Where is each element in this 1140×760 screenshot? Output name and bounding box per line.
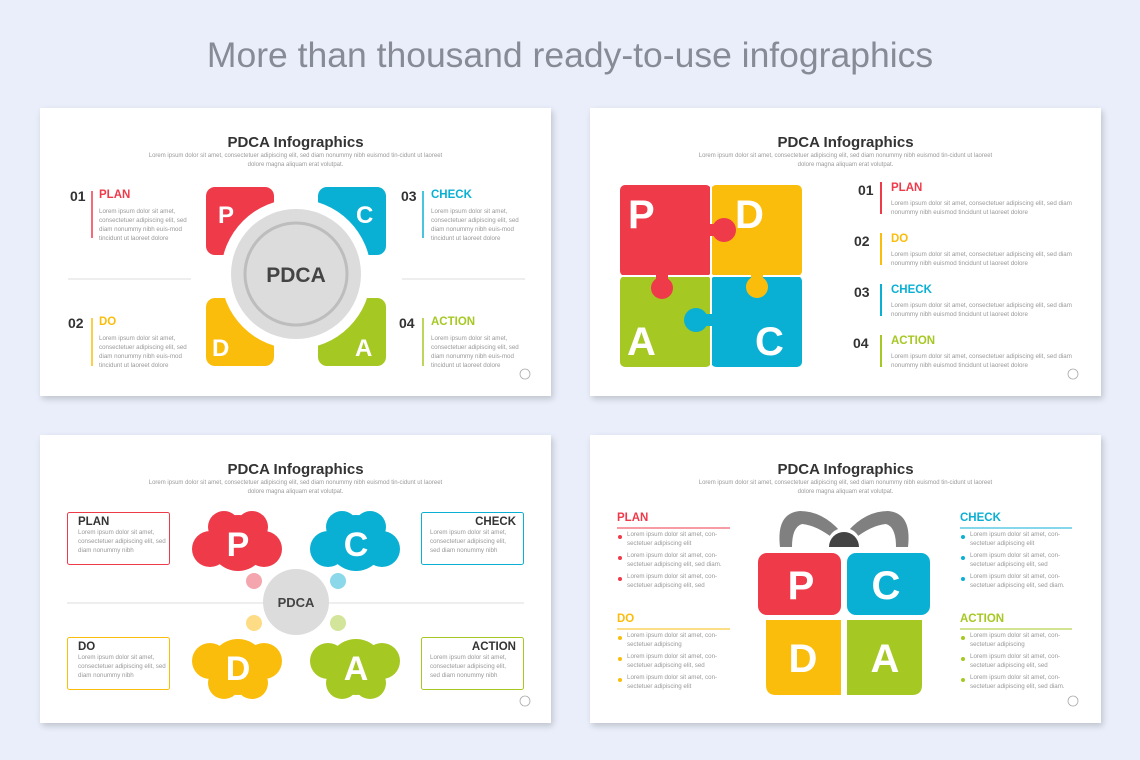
panel title: PDCA Infographics: [777, 134, 914, 151]
chart: PDCA circle: D: [212, 335, 229, 362]
chart: gift box: A: [871, 637, 899, 681]
item: plan: [858, 182, 1072, 216]
list: plan: Lorem ipsum dolor sit amet, con-sectetuer adipiscing elit Lorem ipsum dolor sit amet, con-sectetuer adipiscing elit, sed diam. Lorem ipsum dolor sit amet, con-sectetuer adipiscing elit, sed: [627, 531, 722, 589]
box: do: [78, 641, 166, 679]
subtitle: Lorem ipsum dolor sit amet, consectetuer adipiscing elit, sed diam nonummy nibh euismod tin-cidunt ut laoreet dolore magna aliquam erat volutpat.: [699, 153, 992, 168]
item: do: 02: [854, 233, 870, 249]
chart: clouds: A: [344, 650, 368, 688]
subtitle: Lorem ipsum dolor sit amet, consectetuer adipiscing elit, sed diam nonummy nibh euismod tin-cidunt ut laoreet dolore magna aliquam erat volutpat.: [149, 153, 442, 168]
chart: clouds: PDCA: [278, 595, 315, 610]
chart: clouds: C: [344, 526, 368, 564]
list: do: Lorem ipsum dolor sit amet, con-sectetuer adipiscing Lorem ipsum dolor sit amet, con-sectetuer adipiscing elit, sed Lorem ipsum dolor sit amet, con-sectetuer adipiscing elit: [627, 632, 717, 690]
chart: puzzle: P: [628, 193, 655, 237]
chart: clouds: P: [227, 526, 249, 564]
item: do: [854, 233, 1072, 267]
panel: gift: [590, 435, 1101, 723]
panel title: PDCA Infographics: [227, 134, 364, 151]
box: action: [430, 641, 516, 679]
item: check: [401, 188, 519, 242]
item: do: Lorem ipsum dolor sit amet, consectetuer adipiscing elit, sed diam nonummy nibh euismod tincidunt ut laoreet dolore: [891, 251, 1072, 267]
item: check: Lorem ipsum dolor sit amet, consectetuer adipiscing elit, sed diam nonummy nibh euismod tincidunt ut laoreet dolore: [891, 302, 1072, 318]
chart: PDCA circle: PDCA: [266, 264, 326, 287]
chart: clouds: D: [226, 650, 250, 688]
box: check: [430, 516, 516, 554]
box: plan: PLAN: [78, 516, 109, 528]
item: action: Lorem ipsum dolor sit amet, consectetuer adipiscing elit, sed diam nonummy nibh euismod tincidunt ut laoreet dolore: [891, 353, 1072, 369]
box: plan: Lorem ipsum dolor sit amet, consectetuer adipiscing elit, sed diam nonummy nibh: [78, 529, 166, 554]
panel: clouds: [40, 435, 551, 723]
subtitle: Lorem ipsum dolor sit amet, consectetuer adipiscing elit, sed diam nonummy nibh euismod tin-cidunt ut laoreet dolore magna aliquam erat volutpat.: [149, 480, 442, 495]
item: check: [854, 284, 1072, 318]
chart: gift box: P: [788, 564, 814, 608]
panel title: PDCA Infographics: [227, 461, 364, 478]
item: action: 04: [853, 335, 869, 351]
item: action: 04: [399, 315, 415, 331]
panel: puzzle: [590, 108, 1101, 396]
item: do: DO: [891, 233, 908, 245]
list: plan: [617, 512, 722, 589]
item: action: ACTION: [431, 316, 475, 328]
chart: puzzle: [620, 182, 1078, 380]
box: action: Lorem ipsum dolor sit amet, consectetuer adipiscing elit, sed diam nonummy nibh: [430, 654, 506, 679]
chart: clouds: [67, 511, 530, 706]
item: check: Lorem ipsum dolor sit amet, consectetuer adipiscing elit, sed diam nonummy nibh euis-mod tincidunt ut laoreet dolore: [431, 208, 519, 242]
box: check: CHECK: [475, 516, 516, 528]
item: action: [853, 335, 1072, 369]
box: check: Lorem ipsum dolor sit amet, consectetuer adipiscing elit, sed diam nonummy nibh: [430, 529, 506, 554]
item: action: [399, 315, 519, 369]
chart: PDCA circle: A: [355, 335, 372, 362]
chart: gift box: [617, 511, 1078, 706]
list: action: [960, 613, 1065, 690]
chart: PDCA circle: P: [218, 202, 234, 229]
item: plan: Lorem ipsum dolor sit amet, consectetuer adipiscing elit, sed diam nonummy nibh euismod tincidunt ut laoreet dolore: [891, 200, 1072, 216]
item: do: [68, 315, 187, 369]
box: do: Lorem ipsum dolor sit amet, consectetuer adipiscing elit, sed diam nonummy nibh: [78, 654, 166, 679]
item: check: CHECK: [891, 284, 932, 296]
item: do: DO: [99, 316, 116, 328]
chart: puzzle: D: [735, 193, 764, 237]
chart: gift box: C: [872, 564, 900, 608]
chart: puzzle: C: [755, 320, 784, 364]
item: action: Lorem ipsum dolor sit amet, consectetuer adipiscing elit, sed diam nonummy nibh euis-mod tincidunt ut laoreet dolore: [431, 335, 519, 369]
main title: More than thousand ready-to-use infographics: [207, 35, 933, 75]
item: plan: 01: [858, 182, 874, 198]
item: action: ACTION: [891, 335, 935, 347]
panel: circle quadrants: [40, 108, 551, 396]
list: check: Lorem ipsum dolor sit amet, con-sectetuer adipiscing elit Lorem ipsum dolor sit amet, con-sectetuer adipiscing elit, sed Lorem ipsum dolor sit amet, con-sectetuer adipiscing elit, sed diam.: [970, 531, 1065, 589]
box: action: ACTION: [472, 641, 516, 653]
item: check: 03: [854, 284, 870, 300]
item: plan: PLAN: [99, 189, 130, 201]
item: check: CHECK: [431, 189, 472, 201]
box: plan: [78, 516, 166, 554]
chart: puzzle: A: [627, 320, 656, 364]
chart: gift box: D: [789, 637, 817, 681]
item: do: 02: [68, 315, 84, 331]
list: action: Lorem ipsum dolor sit amet, con-sectetuer adipiscing Lorem ipsum dolor sit amet, con-sectetuer adipiscing elit, sed Lorem ipsum dolor sit amet, con-sectetuer adipiscing elit, sed diam.: [970, 632, 1065, 690]
item: plan: PLAN: [891, 182, 922, 194]
list: action: ACTION: [960, 613, 1004, 625]
item: do: Lorem ipsum dolor sit amet, consectetuer adipiscing elit, sed diam nonummy nibh euis-mod tincidunt ut laoreet dolore: [99, 335, 187, 369]
item: check: 03: [401, 188, 417, 204]
item: plan: [70, 188, 187, 242]
subtitle: Lorem ipsum dolor sit amet, consectetuer adipiscing elit, sed diam nonummy nibh euismod tin-cidunt ut laoreet dolore magna aliquam erat volutpat.: [699, 480, 992, 495]
box: do: DO: [78, 641, 95, 653]
chart: PDCA circle: C: [356, 202, 373, 229]
item: plan: 01: [70, 188, 86, 204]
list: do: [617, 613, 717, 690]
list: check: [960, 512, 1065, 589]
list: plan: PLAN: [617, 512, 648, 524]
list: check: CHECK: [960, 512, 1001, 524]
list: do: DO: [617, 613, 634, 625]
item: plan: Lorem ipsum dolor sit amet, consectetuer adipiscing elit, sed diam nonummy nibh euis-mod tincidunt ut laoreet dolore: [99, 208, 187, 242]
chart: PDCA circle: [68, 187, 530, 380]
panel title: PDCA Infographics: [777, 461, 914, 478]
